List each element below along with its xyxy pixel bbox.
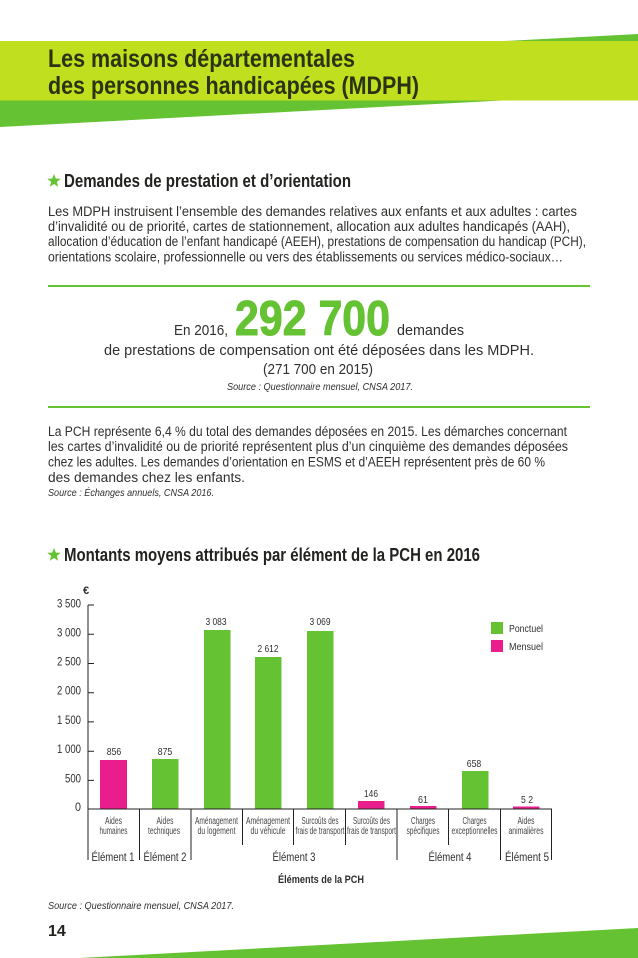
- intro text: d’invalidité ou de priorité, cartes de stationnement, allocation aux adultes handicapés (AAH),: [48, 219, 570, 234]
- category labels: Aides: [105, 816, 122, 827]
- value labels: 5 2: [521, 794, 533, 806]
- category labels: Charges: [462, 816, 486, 827]
- second text block: les cartes d’invalidité ou de priorité représentent plus d’un cinquième des demandes déposées: [48, 439, 568, 454]
- second text block: [48, 424, 568, 499]
- y axis: 500: [65, 772, 81, 786]
- key number: 292 700: [235, 292, 390, 346]
- title: des personnes handicapées (MDPH): [48, 72, 419, 100]
- y axis: 1 500: [57, 713, 81, 727]
- element labels: Élément 2: [144, 851, 186, 864]
- intro text: orientations scolaire, professionnelle ou vers des établissements ou services médico-sociaux…: [48, 250, 563, 264]
- value labels: 3 083: [206, 616, 227, 628]
- key figure panel: demandes: [397, 322, 464, 339]
- value labels: 3 069: [310, 616, 331, 628]
- element labels: Élément 3: [272, 851, 316, 864]
- key figure panel: [48, 285, 590, 408]
- value labels: 146: [364, 788, 378, 800]
- category labels: Aménagement: [246, 816, 290, 827]
- value labels: [107, 616, 533, 806]
- value labels: 856: [107, 746, 121, 758]
- y axis: 2 000: [57, 684, 81, 698]
- legend: Mensuel: [509, 641, 543, 653]
- bar chart: [57, 585, 552, 886]
- key figure panel: Source : Questionnaire mensuel, CNSA 2017.: [227, 381, 413, 393]
- key figure panel: En 2016,: [174, 322, 228, 339]
- title: Les maisons départementales: [48, 45, 355, 73]
- y axis: 3 000: [57, 626, 81, 640]
- chart source: Source : Questionnaire mensuel, CNSA 2017.: [48, 900, 234, 912]
- category labels: Surcoûts des: [353, 816, 390, 827]
- category labels: Surcoûts des: [302, 816, 338, 827]
- legend: Ponctuel: [509, 623, 543, 635]
- category labels: exceptionnelles: [452, 826, 498, 837]
- legend: [491, 622, 543, 653]
- category labels: frais de transport: [347, 826, 396, 837]
- bars: [100, 630, 540, 809]
- x axis title: Éléments de la PCH: [278, 873, 364, 886]
- category labels: spécifiques: [406, 826, 440, 837]
- y axis: 0: [75, 800, 81, 814]
- icon: star: [47, 548, 61, 561]
- element labels: Élément 4: [428, 851, 472, 864]
- y axis: €: [83, 585, 89, 597]
- category labels: animalières: [508, 826, 544, 837]
- page number: 14: [48, 923, 66, 940]
- category labels: du logement: [198, 826, 236, 837]
- value labels: 658: [467, 758, 481, 770]
- second text block: La PCH représente 6,4 % du total des demandes déposées en 2015. Les démarches concernant: [48, 424, 567, 439]
- x axis and separators: [88, 809, 552, 860]
- second text block: Source : Échanges annuels, CNSA 2016.: [48, 486, 214, 499]
- category labels: Aides: [156, 816, 174, 827]
- category labels: techniques: [148, 826, 180, 837]
- category labels: Aides: [518, 816, 534, 827]
- value labels: 2 612: [258, 643, 279, 655]
- element labels: [92, 851, 549, 864]
- intro text: Les MDPH instruisent l’ensemble des demandes relatives aux enfants et aux adultes : cartes: [48, 204, 577, 219]
- element labels: Élément 5: [505, 851, 549, 864]
- y axis: 1 000: [57, 742, 81, 756]
- category labels: frais de transport: [296, 826, 345, 837]
- category labels: Charges: [411, 816, 435, 827]
- second text block: chez les adultes. Les demandes d’orientation en ESMS et d’AEEH représentent près de 60 %: [48, 454, 545, 470]
- icon: star: [47, 174, 61, 187]
- second text block: des demandes chez les enfants.: [48, 470, 245, 485]
- y axis: 2 500: [57, 654, 81, 668]
- value labels: 875: [158, 746, 172, 758]
- key figure panel: (271 700 en 2015): [263, 361, 373, 378]
- heading: demandes: Demandes de prestation et d’orientation: [64, 171, 351, 191]
- footer wedge: [80, 928, 638, 958]
- category labels: [100, 816, 544, 837]
- value labels: 61: [418, 794, 428, 806]
- title: [48, 45, 419, 100]
- header banner: [0, 34, 638, 127]
- heading: montants: Montants moyens attribués par élément de la PCH en 2016: [64, 545, 480, 565]
- y axis: 3 500: [57, 596, 81, 610]
- element labels: Élément 1: [92, 851, 134, 864]
- category labels: Aménagement: [195, 816, 238, 827]
- y axis: [57, 585, 94, 814]
- category labels: du véhicule: [250, 826, 286, 837]
- intro text: [48, 204, 586, 264]
- key figure panel: de prestations de compensation ont été déposées dans les MDPH.: [104, 342, 534, 359]
- category labels: humaines: [100, 826, 128, 837]
